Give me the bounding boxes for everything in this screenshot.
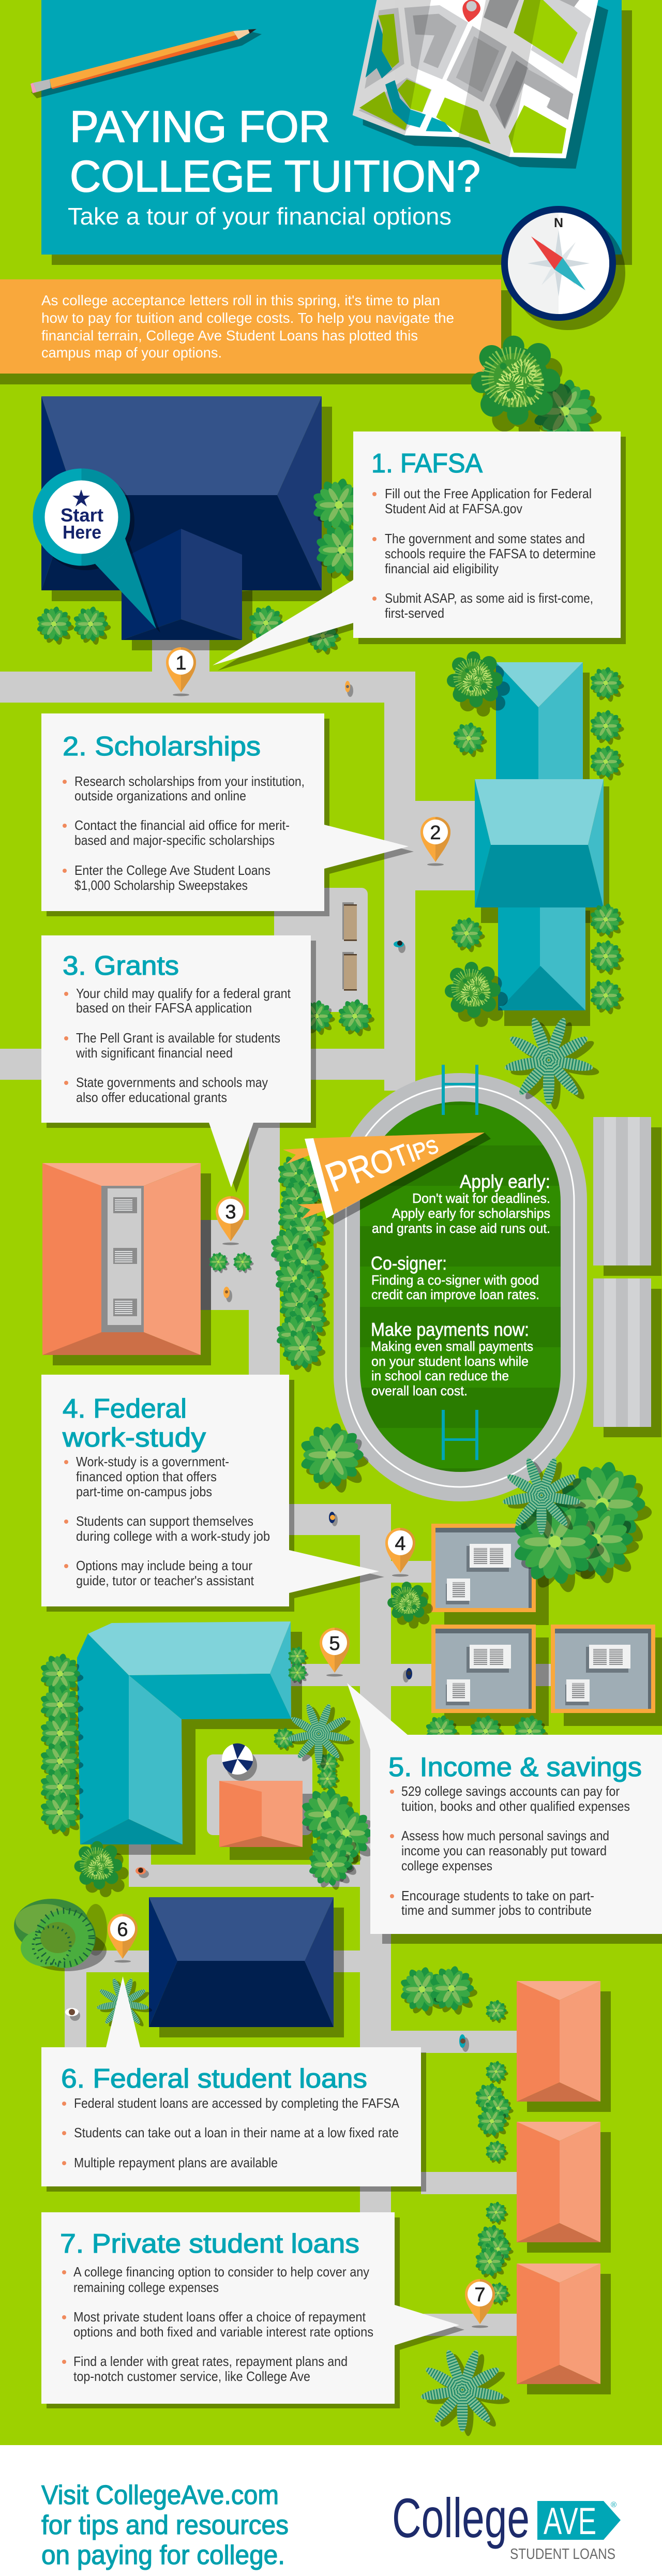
logo: College Ave Student Loans — [392, 2486, 621, 2563]
map pin 6 — [108, 1914, 138, 1963]
tree: bush and shrub under banner — [471, 336, 601, 450]
pro tips: text block — [371, 1171, 550, 1398]
icon: umbrella — [222, 1744, 257, 1781]
building: navy admissions hall — [41, 396, 332, 650]
bullet list — [64, 1454, 270, 1588]
start here marker — [33, 469, 160, 633]
header panel — [41, 0, 632, 265]
panel: 1. FAFSA — [213, 431, 626, 671]
bullet list: Students can support themselves — [76, 1513, 253, 1529]
icon: pencil — [31, 29, 262, 98]
bullet list: financial aid eligibility — [385, 561, 499, 576]
panel: 3. Grants — [41, 935, 316, 1193]
map location pin — [462, 0, 480, 22]
map pin 7 — [465, 2279, 495, 2328]
tip: co-signer: Finding a co-signer with good — [371, 1272, 539, 1288]
tip: apply early: Apply early for scholarships — [392, 1205, 550, 1221]
bullet list: remaining college expenses — [73, 2280, 219, 2295]
vegetation: leafy bushes — [74, 651, 510, 1897]
start here marker: Here — [63, 522, 101, 543]
bullet list: A college financing option to consider to help cover any — [73, 2264, 369, 2280]
map pin 4 — [385, 1528, 415, 1577]
heading: 1. FAFSA — [371, 449, 483, 479]
icon: star — [72, 489, 90, 507]
building: grey field houses — [593, 1117, 661, 1437]
intro banner — [0, 279, 511, 384]
pennant: pro tips: PRO TIPS — [320, 1117, 443, 1201]
bullet list: top-notch customer service, like College Ave — [73, 2369, 310, 2384]
bullet list: first-served — [385, 605, 444, 621]
tip: make payments now: in school can reduce the — [371, 1368, 509, 1383]
logo: College Ave Student Loans: ® — [611, 2500, 616, 2509]
heading: 5. Income & savings — [388, 1752, 642, 1782]
icon: compass: N — [554, 216, 563, 230]
bullet list: Student Aid at FAFSA.gov — [385, 501, 522, 516]
icon: compass — [501, 206, 625, 330]
tip: apply early — [372, 1171, 550, 1236]
plaza with umbrella and small orange building — [207, 1744, 313, 1860]
map pin 5: 5 — [329, 1633, 340, 1655]
heading: 7. Private student loans — [60, 2229, 359, 2259]
panel: 4. Federal work-study — [41, 1375, 384, 1612]
top goal post — [442, 1065, 478, 1115]
bullet list — [390, 1783, 630, 1918]
logo tag: AVE: AVE — [544, 2500, 596, 2542]
footer call to action: Visit CollegeAve.com — [41, 2480, 279, 2510]
panel: 6. Federal student loans — [41, 1976, 426, 2192]
bullet list: 529 college savings accounts can pay for — [401, 1783, 620, 1799]
map sheet and blocks — [353, 0, 598, 158]
logo: College Ave Student Loans: STUDENT LOANS — [510, 2546, 615, 2563]
bullet list — [63, 773, 305, 893]
footer call to action: for tips and resources — [41, 2510, 289, 2540]
bullet list: time and summer jobs to contribute — [401, 1902, 592, 1918]
icon: folded map — [353, 0, 608, 169]
heading: 2. Scholarships — [63, 732, 261, 762]
bullet list: financed option that offers — [76, 1469, 217, 1484]
tip: apply early: and grants in case aid runs out. — [372, 1220, 550, 1236]
paths and roads network — [0, 640, 552, 2336]
building: navy lecture hall — [149, 1897, 344, 2037]
heading — [62, 1394, 206, 1453]
map pin 6: 6 — [117, 1919, 128, 1941]
bullet list: options and both fixed and variable interest rate options — [73, 2324, 373, 2340]
tip: make payments now: Make payments now: — [371, 1319, 529, 1340]
bullet list: Students can take out a loan in their name at a low fixed rate — [74, 2125, 399, 2140]
buildings: orange residence row — [517, 1981, 611, 2394]
bullet list: $1,000 Scholarship Sweepstakes — [74, 877, 248, 893]
heading: work-study — [62, 1423, 206, 1453]
map pin 3: 3 — [225, 1201, 236, 1223]
tip: co-signer: Co-signer: — [371, 1253, 447, 1274]
bullet list: during college with a work-study job — [76, 1528, 270, 1544]
campus walkers — [65, 681, 469, 2052]
tip: co-signer — [371, 1253, 539, 1302]
start here marker: Start — [61, 504, 103, 526]
panel: 5. Income & savings — [347, 1683, 662, 1944]
map pin 1: 1 — [175, 652, 187, 674]
bullet list — [62, 2264, 373, 2384]
bullet list — [62, 2095, 400, 2170]
tip: make payments now — [371, 1319, 533, 1398]
map pin 2: 2 — [430, 822, 441, 844]
map fold shading — [353, 0, 540, 157]
subtitle: Take a tour of your financial options — [68, 203, 452, 230]
grey dormitories with rooftop units — [431, 1524, 662, 1726]
bullet list: The Pell Grant is available for students — [76, 1030, 280, 1046]
tip: apply early: Apply early: — [460, 1171, 550, 1192]
bullet list: Most private student loans offer a choice of repayment — [73, 2309, 366, 2325]
bullet list: Assess how much personal savings and — [401, 1828, 609, 1843]
map pin 7: 7 — [474, 2284, 486, 2306]
bullet list — [64, 986, 291, 1105]
bullet list: guide, tutor or teacher's assistant — [76, 1573, 254, 1588]
building: orange hall with rooftop units — [42, 1163, 211, 1365]
map pin 4: 4 — [395, 1533, 406, 1555]
vegetation: ferns — [96, 1016, 652, 2436]
bullet list: Work-study is a government- — [76, 1454, 229, 1469]
building: teal L-shaped hall — [77, 1621, 302, 1855]
bullet list: Your child may qualify for a federal grant — [76, 986, 291, 1001]
bullet list: Contact the financial aid office for merit- — [74, 817, 290, 833]
intro banner: how to pay for tuition and college costs. To help you navigate the — [41, 310, 454, 326]
tip: make payments now: overall loan cost. — [371, 1383, 468, 1398]
benches — [342, 902, 357, 991]
bullet list: outside organizations and online — [74, 788, 246, 803]
bullet list: Research scholarships from your institution, — [74, 773, 305, 789]
logo: College Ave Student Loans: College — [392, 2486, 530, 2549]
bullet list: Submit ASAP, as some aid is first-come, — [385, 590, 593, 606]
bullet list: tuition, books and other qualified expenses — [401, 1798, 630, 1814]
intro banner: financial terrain, College Ave Student Loans has plotted this — [41, 327, 418, 344]
background: white footer — [0, 2445, 662, 2576]
bullet list: based on their FAFSA application — [76, 1000, 252, 1016]
bullet list: Federal student loans are accessed by completing the FAFSA — [74, 2095, 400, 2111]
tip: co-signer: credit can improve loan rates. — [371, 1287, 539, 1302]
title: COLLEGE TUITION? — [70, 152, 480, 201]
footer call to action — [41, 2480, 289, 2570]
vegetation: large hedge tree — [14, 1899, 107, 1971]
bullet list: Options may include being a tour — [76, 1558, 252, 1573]
bullet list: Fill out the Free Application for Federal — [385, 486, 592, 501]
tip: make payments now: Making even small payments — [371, 1338, 533, 1354]
panel: 2. Scholarships — [41, 713, 414, 916]
tip: apply early: Don't wait for deadlines. — [412, 1190, 550, 1206]
building: teal library — [475, 662, 609, 1026]
vegetation: shrubs — [34, 474, 624, 2306]
footer call to action: on paying for college. — [41, 2540, 285, 2570]
bullet list: based and major-specific scholarships — [74, 832, 275, 848]
bullet list: Encourage students to take on part- — [401, 1888, 594, 1903]
map pin 5 — [320, 1628, 350, 1676]
bullet list: with significant financial need — [76, 1045, 233, 1061]
bullet list: Enter the College Ave Student Loans — [74, 862, 270, 878]
panel: 7. Private student loans — [41, 2212, 464, 2408]
intro banner: campus map of your options. — [41, 345, 222, 361]
bottom goal post — [442, 1410, 478, 1460]
map pin 3 — [216, 1196, 246, 1245]
map pin 2 — [420, 817, 450, 866]
bullet list: college expenses — [401, 1858, 492, 1873]
heading: 4. Federal — [63, 1394, 187, 1424]
heading: 6. Federal student loans — [61, 2064, 367, 2094]
bullet list: also offer educational grants — [76, 1090, 227, 1105]
bullet list: Multiple repayment plans are available — [74, 2155, 278, 2170]
bullet list: schools require the FAFSA to determine — [385, 546, 596, 561]
bullet list — [372, 486, 596, 621]
intro banner: As college acceptance letters roll in this spring, it's time to plan — [41, 292, 440, 308]
title — [70, 102, 480, 201]
bullet list: State governments and schools may — [76, 1075, 268, 1090]
stadium track and football field — [334, 1065, 587, 1501]
map shadow — [363, 5, 608, 169]
bullet list: The government and some states and — [385, 531, 585, 546]
title: PAYING FOR — [70, 102, 330, 152]
tip: make payments now: on your student loans while — [371, 1353, 529, 1369]
pennant: pro tips — [283, 1117, 491, 1225]
heading: 3. Grants — [63, 951, 179, 981]
bullet list: Find a lender with great rates, repayment plans and — [73, 2354, 348, 2369]
bullet list: income you can reasonably put toward — [401, 1843, 607, 1858]
bullet list: part-time on-campus jobs — [76, 1484, 212, 1499]
map pin 1 — [166, 647, 196, 696]
